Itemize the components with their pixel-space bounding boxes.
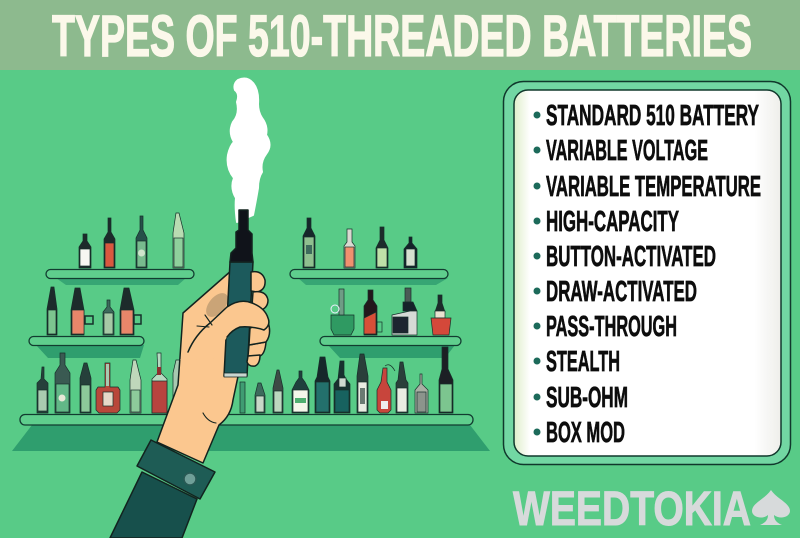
knuckle creases [197, 315, 216, 423]
icon: spade [752, 490, 790, 525]
list labels [546, 100, 761, 449]
shelves with shadows [12, 270, 490, 451]
list labels: HIGH-CAPACITY [546, 206, 679, 238]
hand holding battery [110, 210, 270, 538]
bottles: bottom left shelf [37, 353, 180, 413]
header band with title [0, 0, 800, 70]
list labels: PASS-THROUGH [546, 311, 677, 343]
list labels: SUB-OHM [546, 382, 628, 414]
fingers [180, 272, 270, 366]
bottles: bottom right shelf [240, 347, 453, 413]
battery body [224, 262, 253, 376]
palm shading [202, 289, 232, 321]
bottles: middle left shelf [47, 287, 141, 335]
palm and wrist [157, 270, 240, 463]
cuff [137, 440, 215, 499]
list labels: BOX MOD [546, 417, 625, 449]
battery base ring [224, 373, 247, 377]
thumb [180, 301, 269, 360]
watermark logo: WEEDTOKIA [513, 483, 751, 536]
list labels: STEALTH [546, 346, 620, 378]
panel: battery types list [504, 82, 790, 464]
cuff button [184, 473, 196, 485]
battery mouthpiece [230, 210, 253, 262]
smoke [228, 79, 270, 222]
list labels: DRAW-ACTIVATED [546, 276, 697, 308]
list bullets [534, 112, 540, 436]
bottles: top right shelf [303, 218, 417, 268]
bottles: top left shelf [79, 213, 184, 268]
sleeve [110, 472, 197, 538]
bottles: middle right shelf [331, 288, 451, 335]
